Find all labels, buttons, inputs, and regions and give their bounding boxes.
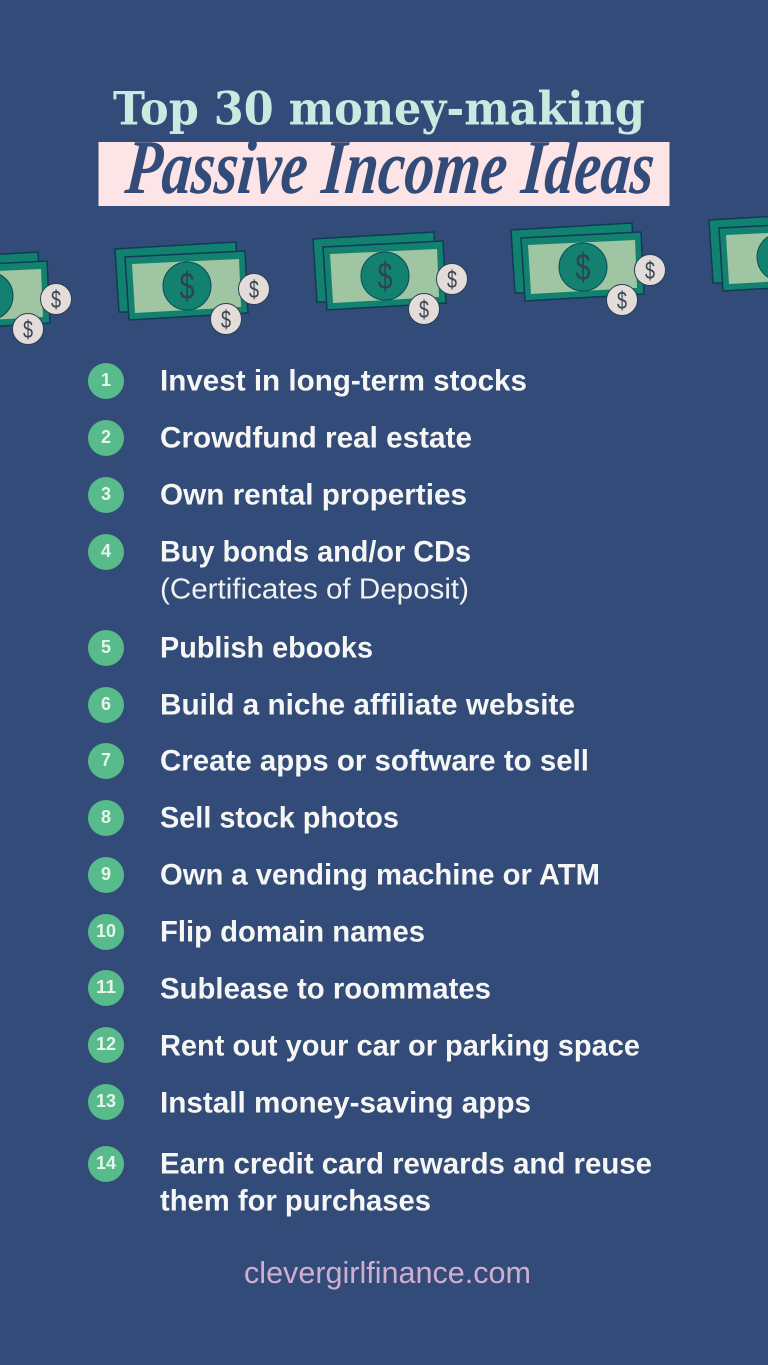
item 9: Own a vending machine or ATM (160, 858, 600, 892)
icon: money bill with coins 4: $ (576, 247, 590, 289)
item 1: 1 (101, 370, 111, 390)
icon: money bill with coins 3: $ (378, 256, 392, 298)
footer website: clevergirlfinance.com (244, 1255, 531, 1290)
item 2: Crowdfund real estate (160, 422, 472, 454)
icon: money bill with coins 3 (313, 232, 468, 324)
title: Top 30 money-making: Top 30 money-making (113, 82, 645, 136)
item 12: 12 (96, 1034, 116, 1054)
money illustrations row (0, 213, 768, 344)
list of ideas (88, 363, 652, 1218)
icon: money bill with coins 3: $ (447, 266, 457, 294)
item 11: Sublease to roommates (160, 972, 491, 1006)
item 14: Earn credit card rewards and reuse (160, 1148, 652, 1180)
icon: money bill with coins 3: $ (419, 296, 429, 324)
item 8 (88, 800, 399, 836)
item 3: 3 (101, 484, 111, 504)
item 5: Publish ebooks (160, 632, 373, 664)
item 3: Own rental properties (160, 478, 467, 512)
icon: money bill with coins 4: $ (617, 287, 627, 315)
icon: money bill with coins 4 (511, 223, 666, 316)
icon: money bill with coins 4: $ (645, 257, 655, 285)
icon: money bill with coins 2: $ (221, 306, 231, 334)
item 1: Invest in long-term stocks (160, 364, 527, 398)
icon: money bill with coins 1 (0, 252, 72, 344)
item 4: (Certificates of Deposit) (160, 574, 469, 606)
icon: money bill partial 5 (709, 213, 768, 291)
item 11: 11 (96, 977, 116, 997)
icon: money bill with coins 2 (115, 242, 270, 334)
item 4: Buy bonds and/or CDs (160, 536, 471, 568)
item 13: 13 (96, 1091, 116, 1111)
item 4 (88, 534, 471, 606)
item 6: Build a niche affiliate website (160, 688, 575, 722)
item 10: 10 (96, 921, 116, 941)
item 12: Rent out your car or parking space (160, 1030, 640, 1062)
item 9: 9 (101, 864, 111, 884)
item 14: 14 (96, 1153, 116, 1173)
icon: money bill with coins 2: $ (249, 276, 259, 304)
item 10: Flip domain names (160, 916, 425, 948)
item 2: 2 (101, 427, 111, 447)
item 8: 8 (101, 807, 111, 827)
heading banner: Passive Income Ideas: Passive Income Ideas (121, 125, 658, 211)
icon: money bill with coins 2: $ (180, 266, 194, 308)
item 7: Create apps or software to sell (160, 744, 589, 778)
item 5: 5 (101, 637, 111, 657)
item 6: 6 (101, 694, 111, 714)
item 4: 4 (101, 541, 111, 561)
item 7: 7 (101, 750, 111, 770)
icon: money bill with coins 1: $ (51, 286, 61, 314)
icon: money bill with coins 1: $ (23, 316, 33, 344)
item 5 (88, 630, 373, 666)
item 13: Install money-saving apps (160, 1086, 531, 1120)
item 14: them for purchases (160, 1184, 431, 1218)
item 14 (88, 1146, 652, 1218)
item 8: Sell stock photos (160, 802, 399, 834)
